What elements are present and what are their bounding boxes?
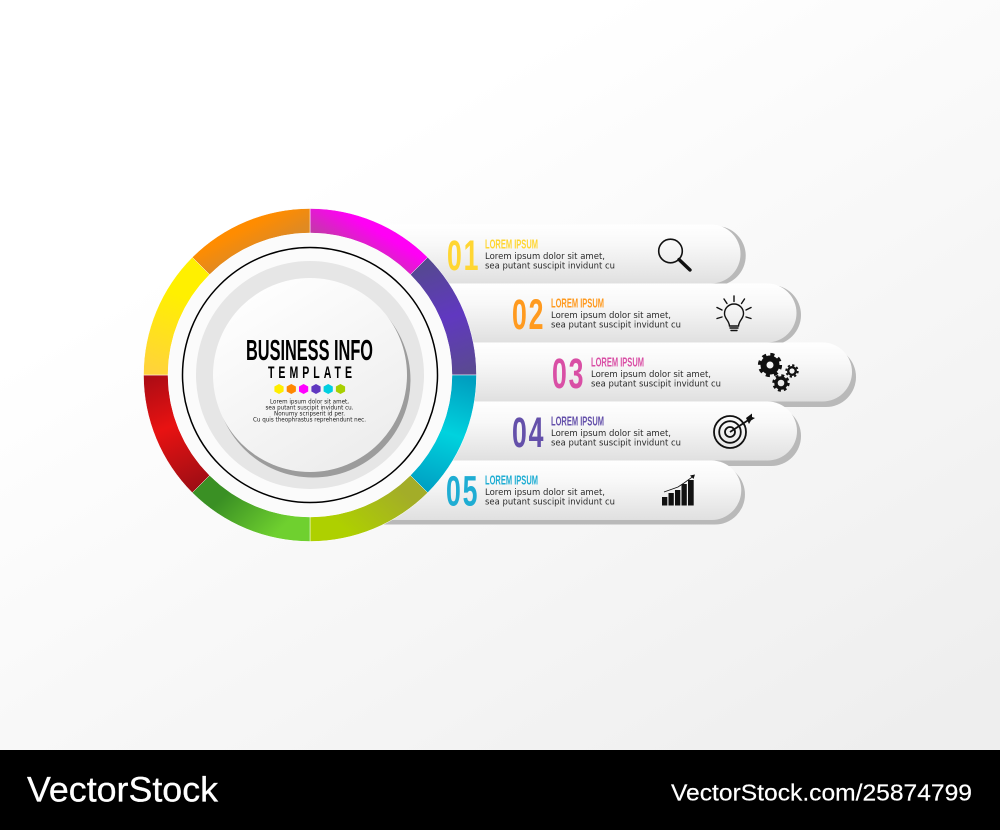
- step 4 text: 04: [512, 409, 545, 457]
- icon: magnifier: [659, 239, 690, 270]
- title: TEMPLATE: [268, 362, 352, 382]
- panel: step 5 pill: [380, 460, 745, 524]
- step 2 text: Lorem ipsum dolor sit amet,: [551, 311, 671, 321]
- step 1 text: sea putant suscipit invidunt cu: [485, 262, 615, 272]
- footer bar: [0, 750, 1000, 830]
- color hexagon dots: [274, 384, 345, 394]
- step 1 text: [447, 232, 615, 280]
- center body text: Cu quis theophrastus reprehendunt nec.: [253, 418, 366, 424]
- step 1 text: LOREM IPSUM: [485, 236, 538, 251]
- step 5 text: LOREM IPSUM: [485, 472, 538, 487]
- step 5 text: Lorem ipsum dolor sit amet,: [485, 488, 605, 498]
- icon: target: [714, 414, 755, 448]
- step 3 text: 03: [552, 350, 585, 398]
- icon: light bulb: [717, 296, 751, 330]
- step 3 text: sea putant suscipit invidunt cu: [591, 380, 721, 390]
- step 3 text: Lorem ipsum dolor sit amet,: [591, 370, 711, 380]
- step 4 text: Lorem ipsum dolor sit amet,: [551, 429, 671, 439]
- title: [246, 335, 373, 382]
- center body text: [253, 400, 366, 424]
- center body text: sea putant suscipit invidunt cu.: [266, 406, 354, 412]
- panel: step 4 pill: [380, 402, 801, 466]
- watermark right: VectorStock.com/25874799: [671, 780, 972, 806]
- step 5 text: sea putant suscipit invidunt cu: [485, 498, 615, 508]
- center body text: Nonumy scripserit id per.: [274, 412, 345, 418]
- panel: step 1 pill: [380, 224, 746, 286]
- step 4 text: sea putant suscipit invidunt cu: [551, 438, 681, 448]
- step 2 text: LOREM IPSUM: [551, 295, 604, 310]
- panel: step 2 pill: [380, 284, 801, 345]
- step 1 text: Lorem ipsum dolor sit amet,: [485, 252, 605, 262]
- icon: gears: [760, 354, 798, 390]
- step 4 text: LOREM IPSUM: [551, 413, 604, 428]
- step 5 text: [446, 467, 615, 515]
- step 3 text: [552, 350, 721, 398]
- step 5 text: 05: [446, 467, 479, 515]
- step 2 text: sea putant suscipit invidunt cu: [551, 320, 681, 330]
- title: BUSINESS INFO: [246, 335, 373, 367]
- step 1 text: 01: [447, 232, 480, 280]
- center disc: [168, 233, 452, 517]
- step 3 text: LOREM IPSUM: [591, 354, 644, 369]
- watermark left: VectorStock: [27, 771, 219, 810]
- icon: growth chart: [662, 474, 695, 506]
- step 2 text: [512, 291, 681, 339]
- colored ring: [144, 208, 476, 542]
- step 4 text: [512, 409, 681, 457]
- center body text: Lorem ipsum dolor sit amet,: [270, 400, 349, 406]
- step 2 text: 02: [512, 291, 545, 339]
- panel: step 3 pill: [380, 342, 856, 407]
